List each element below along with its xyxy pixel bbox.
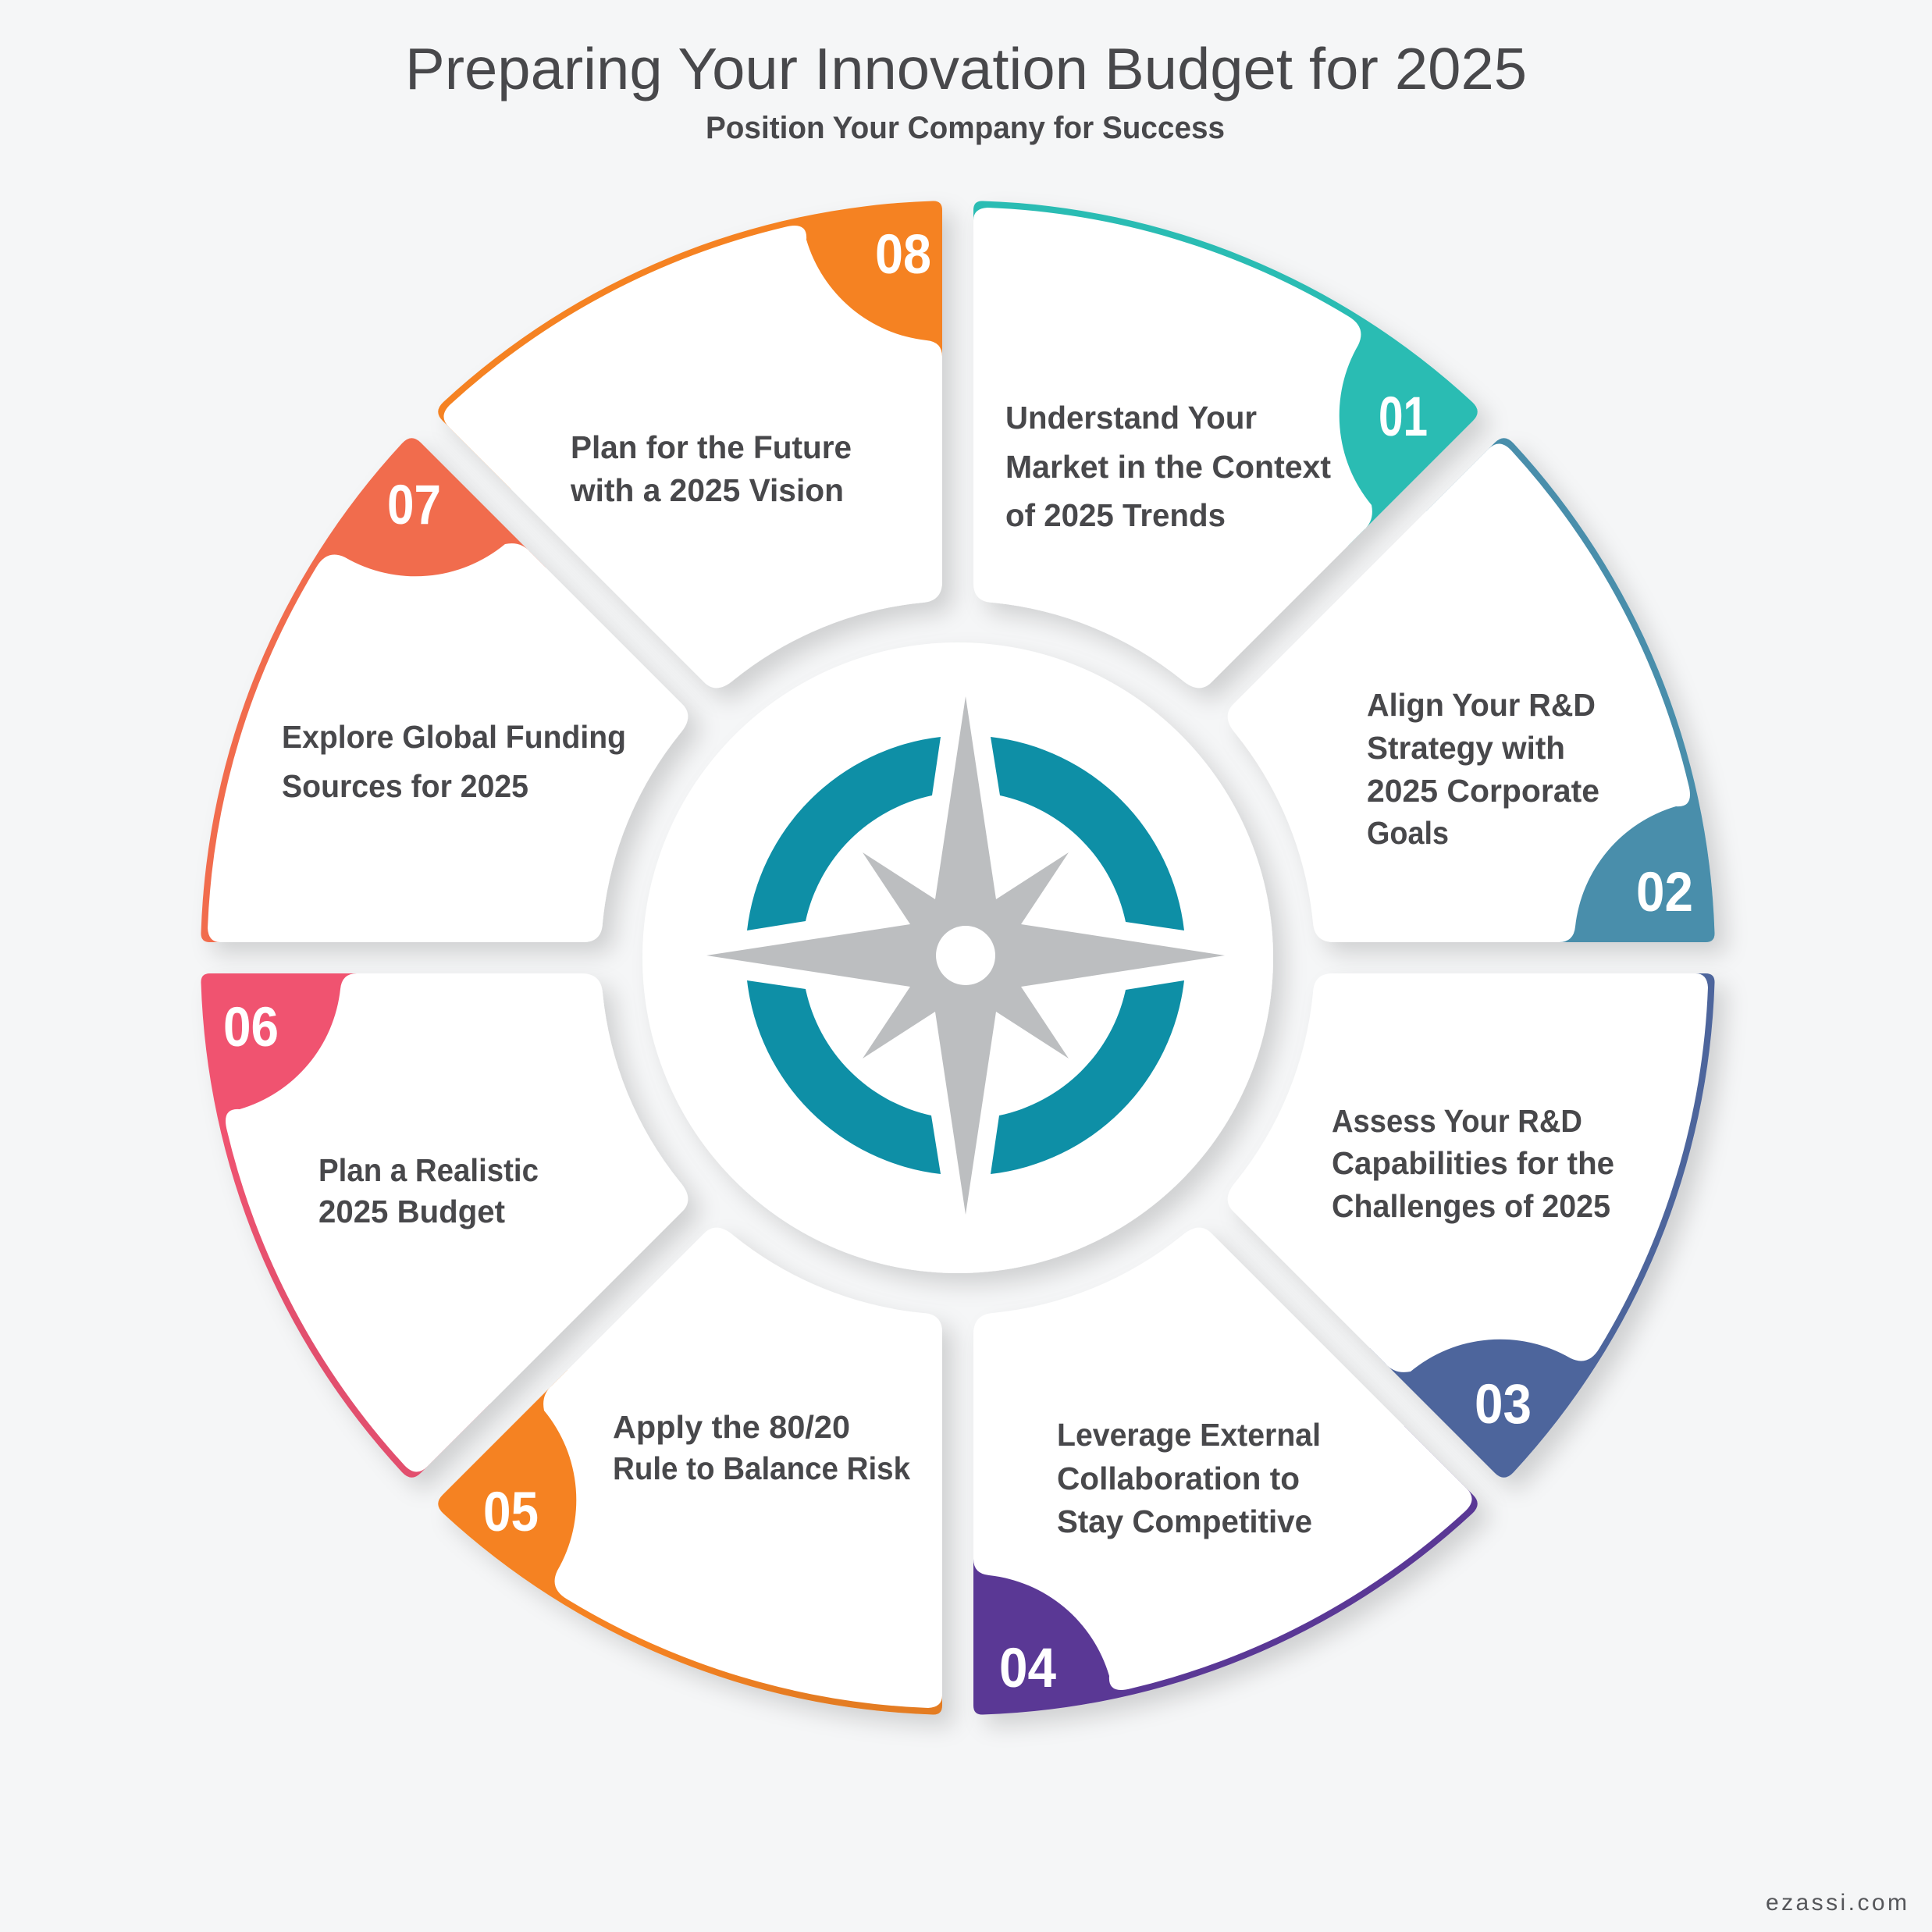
label 03: Assess Your R&D — [1332, 1103, 1582, 1139]
label 07: Explore Global Funding — [282, 719, 626, 755]
number 01: 01 — [1379, 386, 1428, 448]
number 05: 05 — [483, 1482, 539, 1543]
label 02: Strategy with — [1367, 730, 1565, 766]
label 06: 2025 Budget — [318, 1194, 505, 1229]
number 03: 03 — [1475, 1374, 1532, 1436]
number 06: 06 — [223, 997, 279, 1059]
label 02 — [1367, 687, 1599, 851]
label 07: Sources for 2025 — [282, 768, 528, 804]
wedge shape 04 — [973, 1228, 1478, 1715]
panel: step 03 assess your R&D capabilities — [1228, 973, 1715, 1478]
label 01 — [1005, 400, 1331, 533]
compass ring — [747, 737, 1184, 1174]
label 05: Rule to Balance Risk — [613, 1450, 910, 1486]
label 02: 2025 Corporate — [1367, 773, 1599, 809]
wedge shape 06 — [201, 973, 688, 1478]
label 04: Collaboration to — [1057, 1461, 1300, 1496]
panel: step 02 align your R&D strategy — [1228, 438, 1715, 942]
icon: compass rose — [706, 696, 1225, 1215]
label 03 — [1332, 1103, 1614, 1224]
watermark: ezassi.com — [1766, 1890, 1907, 1916]
label 04: Leverage External — [1057, 1417, 1321, 1453]
compass star — [706, 696, 1225, 1215]
number 04: 04 — [999, 1638, 1056, 1699]
label 04: Stay Competitive — [1057, 1503, 1312, 1539]
subtitle: Position Your Company for Success — [706, 111, 1225, 145]
wedge shape 05 — [438, 1228, 942, 1715]
label 02: Align Your R&D — [1367, 687, 1596, 723]
label 06 — [318, 1152, 539, 1229]
label 05: Apply the 80/20 — [613, 1409, 850, 1445]
label 08 — [570, 429, 852, 508]
wedge shape 02 — [1228, 438, 1715, 942]
panel: step 06 plan a realistic budget — [201, 973, 688, 1478]
label 03: Capabilities for the — [1332, 1145, 1614, 1181]
label 05 — [613, 1409, 910, 1486]
label 03: Challenges of 2025 — [1332, 1188, 1610, 1224]
compass hub — [936, 926, 995, 985]
label 08: Plan for the Future — [571, 429, 852, 465]
label 04 — [1057, 1417, 1321, 1539]
label 01: Market in the Context — [1005, 449, 1331, 485]
wedge shape 01 — [973, 201, 1478, 688]
centre circle — [642, 642, 1273, 1273]
label 06: Plan a Realistic — [318, 1152, 539, 1188]
wedge shape 08 — [438, 201, 942, 688]
panel: step 01 understand your market — [973, 201, 1478, 688]
panel: step 08 plan for the future — [438, 201, 942, 688]
label 01: Understand Your — [1005, 400, 1257, 436]
panel: step 07 explore global funding — [201, 438, 688, 942]
wedge shape 07 — [201, 438, 688, 942]
label 01: of 2025 Trends — [1005, 497, 1226, 533]
panel: step 04 leverage external collaboration — [973, 1228, 1478, 1715]
label 08: with a 2025 Vision — [570, 472, 844, 508]
label 07 — [282, 719, 626, 804]
number 08: 08 — [875, 224, 931, 286]
panel: step 05 apply the 80/20 rule — [438, 1228, 942, 1715]
number 02: 02 — [1636, 862, 1693, 923]
panel: centre compass — [642, 642, 1273, 1273]
title: Preparing Your Innovation Budget for 2025 — [405, 36, 1527, 101]
wedge shape 03 — [1228, 973, 1715, 1478]
label 02: Goals — [1367, 815, 1449, 851]
number 07: 07 — [387, 475, 441, 536]
